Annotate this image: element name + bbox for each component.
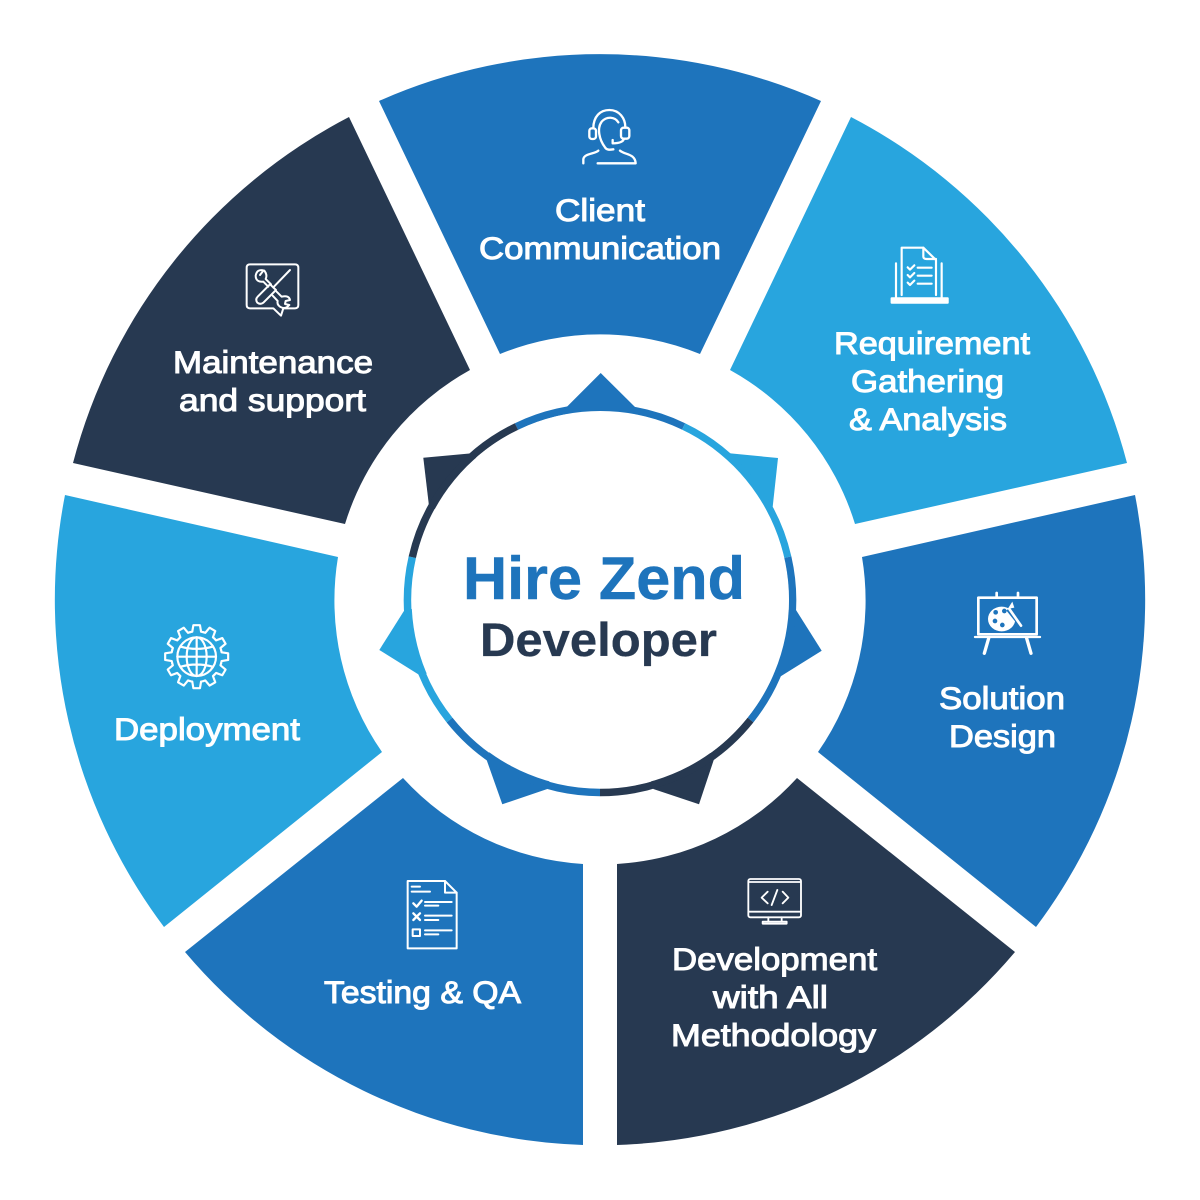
icon: monitor with code brackets bbox=[748, 879, 801, 924]
icon: tools in speech bubble bbox=[247, 264, 298, 316]
label: deployment: Deployment bbox=[114, 711, 300, 747]
label: development with all methodology: Methodology bbox=[671, 1017, 876, 1053]
label: requirement gathering and analysis: Requirement bbox=[834, 325, 1030, 361]
icon: easel with palette bbox=[975, 593, 1040, 653]
label: client communication: Communication bbox=[479, 230, 721, 266]
label: maintenance and support: and support bbox=[179, 382, 366, 418]
seven triangular points around the badge bbox=[379, 373, 822, 804]
white centre disc bbox=[412, 411, 789, 788]
subtitle: Developer: Developer bbox=[480, 613, 717, 666]
icon: headset agent bbox=[583, 110, 636, 163]
label: solution design: Solution bbox=[939, 680, 1065, 716]
label: development with all methodology: with All bbox=[712, 979, 828, 1015]
label: development with all methodology: Development bbox=[672, 941, 877, 977]
label: solution design: Design bbox=[949, 718, 1056, 754]
label: requirement gathering and analysis: Gathering bbox=[851, 363, 1004, 399]
segment: testing and QA bbox=[185, 778, 583, 1145]
center badge bbox=[379, 373, 822, 804]
label: client communication: Client bbox=[555, 192, 645, 228]
label: testing and QA: Testing & QA bbox=[324, 974, 521, 1010]
label: requirement gathering and analysis: & Analysis bbox=[849, 401, 1007, 437]
segment: deployment bbox=[55, 495, 382, 927]
segment: client communication bbox=[379, 54, 821, 354]
segment: solution design bbox=[818, 495, 1145, 927]
label: maintenance and support: Maintenance bbox=[173, 344, 373, 380]
segment: requirement gathering and analysis bbox=[730, 117, 1127, 524]
segment: development with all methodology bbox=[617, 778, 1015, 1145]
icon: test checklist document bbox=[408, 881, 457, 948]
icon: globe in gear bbox=[165, 625, 228, 688]
segment: maintenance and support bbox=[73, 117, 470, 524]
segmented colour ring bbox=[407, 408, 793, 792]
title: Hire Zend: Hire Zend bbox=[463, 545, 745, 612]
icon: checklist on laptop bbox=[892, 248, 948, 303]
